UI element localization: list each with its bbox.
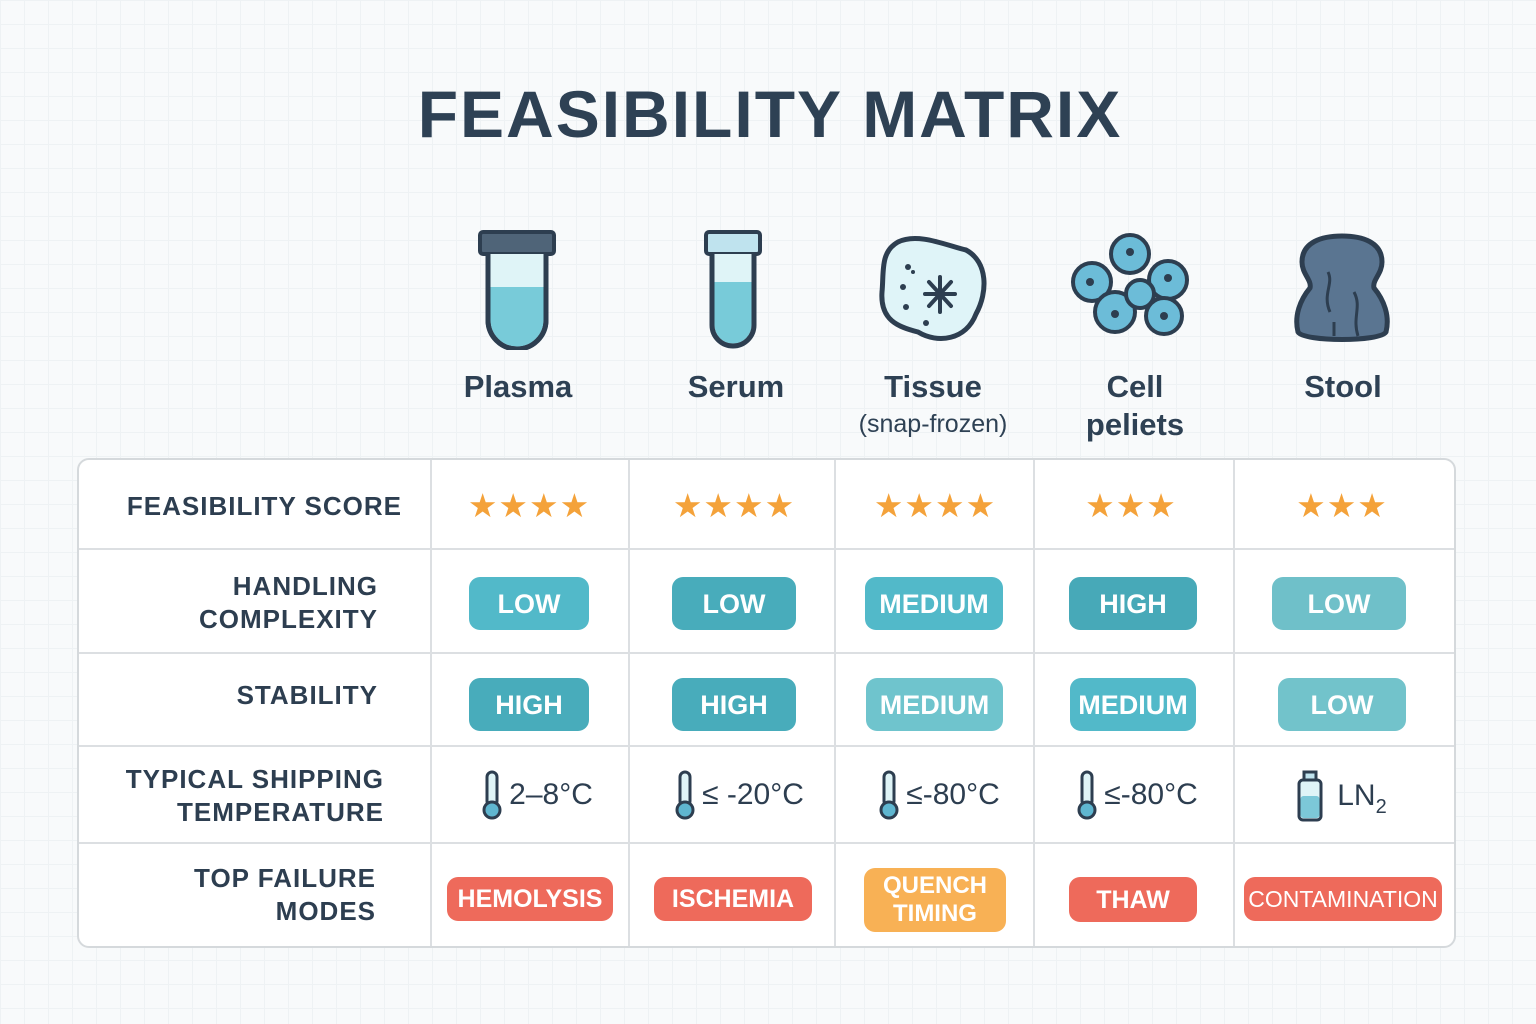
stars row: ★★★★: [468, 487, 590, 524]
icon: tissue: [879, 236, 987, 341]
icon: plasma tube: [478, 230, 556, 350]
row label: failure modes: MODES: [276, 896, 376, 926]
label: tissue: Tissue: [884, 369, 982, 404]
temperature row: [482, 770, 1387, 822]
stability pills: MEDIUM: [880, 690, 989, 720]
temperature row: 2–8°C: [509, 778, 593, 811]
row label: failure modes: [194, 863, 376, 926]
stability pills: LOW: [1310, 690, 1373, 720]
failure pills: QUENCH: [883, 872, 987, 899]
label: plasma: Plasma: [464, 369, 572, 404]
failure pills: TIMING: [893, 900, 977, 927]
failure pills: CONTAMINATION: [1248, 886, 1438, 912]
handling pills: LOW: [1308, 588, 1370, 618]
handling pills: LOW: [498, 588, 560, 618]
stars row: ★★★★: [673, 487, 795, 524]
failure pills: HEMOLYSIS: [458, 885, 602, 913]
icon: cell pellets: [1071, 233, 1189, 336]
stars row: ★★★★: [874, 487, 996, 524]
row label: handling complexity: COMPLEXITY: [199, 604, 378, 634]
label: serum: Serum: [688, 369, 784, 404]
handling pills: LOW: [702, 588, 765, 618]
label: tissue: (snap-frozen): [859, 410, 1007, 438]
table: [77, 458, 1456, 948]
label: cell pellets: peliets: [1086, 407, 1184, 442]
row label: shipping temperature: TEMPERATURE: [177, 797, 384, 827]
icon: stool: [1294, 234, 1390, 342]
stars row: ★★★: [1085, 487, 1177, 524]
label: cell pellets: Cell: [1107, 369, 1163, 404]
stars row: ★★★: [1296, 487, 1388, 524]
title: FEASIBILITY MATRIX: [418, 77, 1122, 151]
row label: handling complexity: [199, 571, 378, 634]
row label: shipping temperature: TYPICAL SHIPPING: [126, 764, 384, 794]
failure pills: THAW: [1096, 886, 1170, 914]
label: tissue: [859, 369, 1007, 438]
stars row: [468, 487, 1388, 524]
row label: failure modes: TOP FAILURE: [194, 863, 376, 893]
stability pills: MEDIUM: [1078, 690, 1188, 720]
stability pills: HIGH: [495, 690, 563, 720]
label: stool: Stool: [1304, 369, 1382, 404]
stability pills: [469, 678, 1406, 731]
handling pills: HIGH: [1099, 588, 1167, 618]
stability pills: HIGH: [700, 690, 768, 720]
label: cell pellets: [1086, 369, 1184, 442]
handling pills: [469, 577, 1406, 630]
handling pills: MEDIUM: [879, 588, 989, 618]
row label: feasibility score: FEASIBILITY SCORE: [127, 491, 402, 521]
icon: serum tube: [704, 230, 762, 348]
temperature row: ≤ -20°C: [702, 778, 804, 811]
temperature row: ≤-80°C: [1104, 778, 1198, 811]
temperature row: ≤-80°C: [906, 778, 1000, 811]
row label: stability: STABILITY: [237, 680, 378, 710]
failure pills: [447, 868, 1442, 932]
failure pills: ISCHEMIA: [672, 885, 794, 913]
temperature row: LN2: [1337, 779, 1387, 818]
row label: shipping temperature: [126, 764, 384, 827]
row label: handling complexity: HANDLING: [233, 571, 378, 601]
